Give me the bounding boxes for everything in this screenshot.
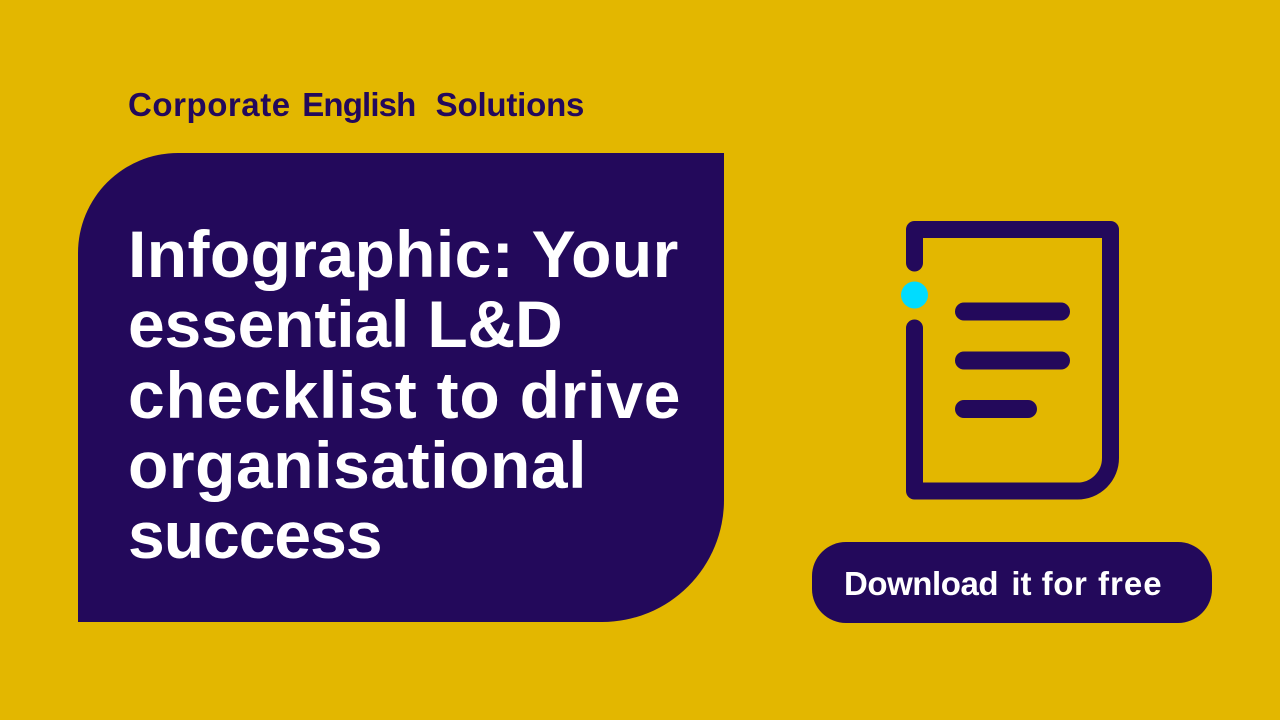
title text: organisational <box>128 428 587 502</box>
title text <box>128 217 681 572</box>
button label: Download it for free <box>844 565 1163 602</box>
button: download <box>812 542 1212 623</box>
title text: Infographic: Your <box>128 217 679 291</box>
brand heading: Corporate English Solutions <box>128 86 584 122</box>
title text: success <box>128 498 382 572</box>
title text: essential L&D <box>128 287 563 361</box>
icon: document <box>901 221 1119 500</box>
title text: checklist to drive <box>128 358 681 432</box>
panel: title <box>78 153 724 622</box>
